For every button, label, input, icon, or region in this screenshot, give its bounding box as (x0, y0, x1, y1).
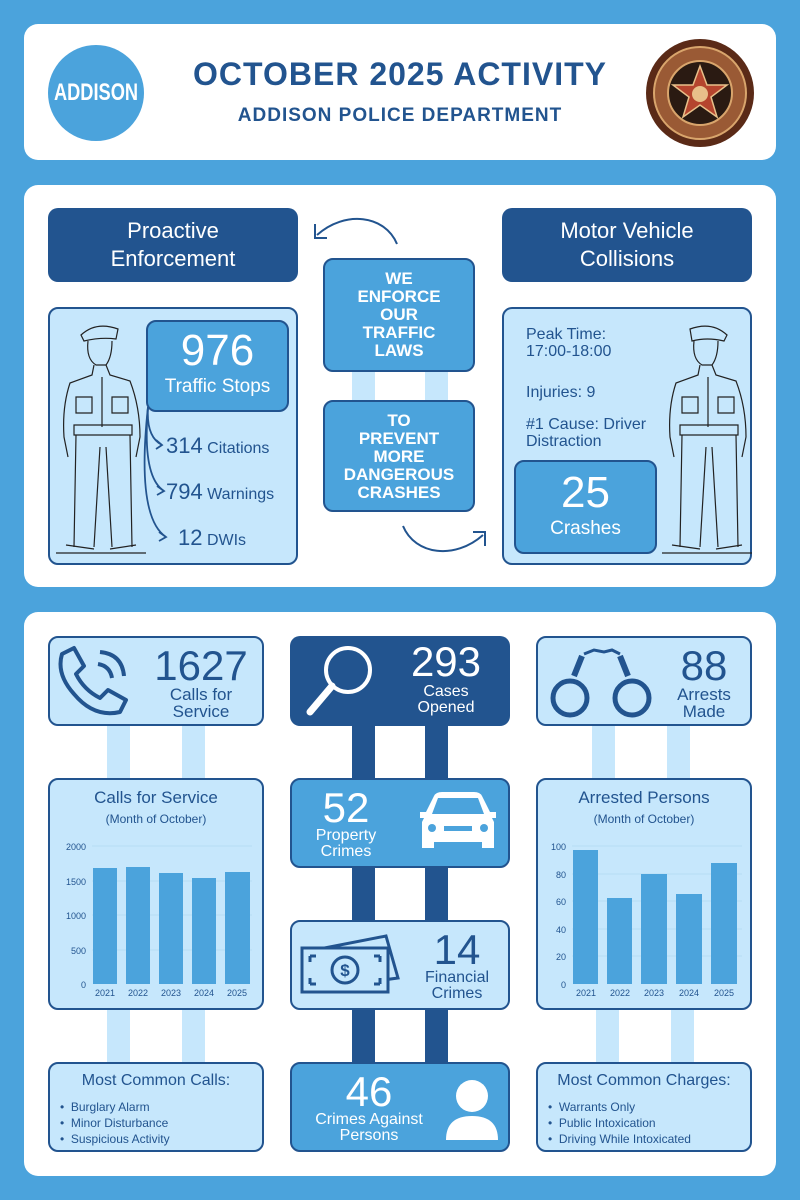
text block: We enforce our traffic laws (323, 258, 475, 372)
text: collision details: Injuries: 9 (526, 384, 595, 401)
icon: money (300, 934, 400, 994)
heading: Proactive Enforcement: Enforcement (111, 246, 235, 271)
chart: arrested persons: 60 (556, 897, 566, 907)
text block: We enforce our traffic laws: TRAFFIC (363, 323, 435, 342)
stat: arrests made (536, 636, 752, 726)
text block: To prevent more dangerous crashes: TO (387, 411, 411, 430)
stat box: 976 traffic stops: Traffic Stops (165, 376, 270, 397)
stat: crimes against persons: Crimes Against (315, 1111, 423, 1128)
subtitle: ADDISON POLICE DEPARTMENT (238, 105, 562, 126)
list: most common calls: • Minor Disturbance (60, 1116, 168, 1130)
chart: arrested persons: (Month of October) (594, 812, 694, 826)
text: 314 citations: 314 Citations (166, 433, 269, 458)
connector strips center (352, 372, 375, 402)
text: collision details: Peak Time: (526, 326, 606, 343)
title: OCTOBER 2025 ACTIVITY (193, 56, 607, 92)
chart: calls for service: 2021 (95, 988, 115, 998)
chart: calls for service: (Month of October) (106, 812, 206, 826)
chart: arrested persons: 80 (556, 870, 566, 880)
chart: calls for service: 2000 (66, 842, 86, 852)
heading: Motor Vehicle Collisions: Motor Vehicle (560, 218, 694, 243)
stat: calls for service: Calls for (170, 685, 232, 704)
arrow: bottom curved (402, 526, 486, 552)
chart: arrested persons: 40 (556, 925, 566, 935)
stat: property crimes (290, 778, 510, 868)
arrows: breakdown (144, 407, 168, 542)
icon: magnifier (306, 646, 372, 716)
chart: calls for service: 2023 (161, 988, 181, 998)
list: most common calls: Most Common Calls: (82, 1072, 230, 1089)
list: most common charges (536, 1062, 752, 1152)
stat: calls for service: Service (173, 702, 229, 721)
list: most common calls (48, 1062, 264, 1152)
icon: money: $ (340, 961, 350, 980)
panel: traffic (24, 185, 776, 587)
panel: proactive stats (48, 307, 298, 565)
list: most common calls: • Burglary Alarm (60, 1100, 150, 1114)
stat: financial crimes: Crimes (432, 985, 482, 1002)
stat: arrests made: Made (683, 702, 725, 721)
arrow: top curved (314, 218, 398, 244)
text: 794 warnings: 794 Warnings (166, 479, 274, 504)
chart: arrested persons: 2025 (714, 988, 734, 998)
stat: cases opened: Cases (423, 683, 469, 700)
chart: arrested persons: 0 (561, 980, 566, 990)
stat box: 976 traffic stops (146, 320, 289, 412)
chart: arrested persons: 2024 (679, 988, 699, 998)
chart: arrested persons: 2021 (576, 988, 596, 998)
stat: property crimes: 52 (323, 784, 369, 831)
panel: collision stats (502, 307, 752, 565)
icon: officer (662, 326, 752, 554)
chart: arrested persons (536, 778, 752, 1010)
stat: financial crimes: Financial (425, 969, 489, 986)
stat: arrests made: Arrests (677, 685, 731, 704)
connector strips (107, 726, 130, 778)
stat: property crimes: Property (316, 827, 376, 844)
text block: We enforce our traffic laws: LAWS (374, 341, 424, 360)
text block: To prevent more dangerous crashes: MORE (374, 447, 424, 466)
text: collision details: Distraction (526, 433, 602, 450)
stat: financial crimes (290, 920, 510, 1010)
chart: arrested persons: Arrested Persons (578, 788, 710, 807)
stat box: 25 crashes (514, 460, 657, 554)
text block: To prevent more dangerous crashes: DANGEROUS (344, 465, 454, 484)
chart: calls for service: 0 (81, 980, 86, 990)
chart: calls for service: 2022 (128, 988, 148, 998)
stat: crimes against persons (290, 1062, 510, 1152)
chart: calls for service (48, 778, 264, 1010)
chart: calls for service: 2025 (227, 988, 247, 998)
chart: calls for service: Calls for Service (94, 788, 218, 807)
badge icon (646, 39, 754, 147)
icon: car (420, 792, 496, 848)
text: collision details: 17:00-18:00 (526, 343, 611, 360)
stat: crimes against persons: 46 (346, 1068, 392, 1115)
chart: calls for service: 1500 (66, 877, 86, 887)
text: 12 DWIs: 12 DWIs (178, 525, 246, 550)
icon: phone (58, 646, 128, 716)
stat: crimes against persons: Persons (340, 1127, 398, 1144)
logo: Addison circle (48, 45, 144, 141)
icon: handcuffs (550, 648, 652, 718)
text block: We enforce our traffic laws: WE (385, 269, 413, 288)
stat box: 976 traffic stops: 976 (181, 326, 254, 375)
chart: arrested persons: 20 (556, 952, 566, 962)
stat: cases opened (290, 636, 510, 726)
logo: Addison circle: ADDISON (54, 79, 138, 106)
text block: We enforce our traffic laws: OUR (380, 305, 418, 324)
header card (24, 24, 776, 160)
text: collision details: #1 Cause: Driver (526, 416, 646, 433)
list: most common charges: • Public Intoxication (548, 1116, 656, 1130)
chart: calls for service: 2024 (194, 988, 214, 998)
icon: person (446, 1080, 498, 1140)
list: most common charges: • Driving While Intoxicated (548, 1132, 691, 1146)
chart: calls for service: 1000 (66, 911, 86, 921)
list: most common charges: Most Common Charges: (557, 1072, 731, 1089)
chart: arrested persons: 2023 (644, 988, 664, 998)
icon: officer (56, 326, 146, 554)
heading: Motor Vehicle Collisions (502, 208, 752, 282)
stat: calls for service (48, 636, 264, 726)
list: most common charges: • Warrants Only (548, 1100, 635, 1114)
stat: cases opened: 293 (411, 638, 481, 685)
stat: cases opened: Opened (418, 699, 474, 716)
panel: crime (24, 612, 776, 1176)
heading: Motor Vehicle Collisions: Collisions (580, 246, 674, 271)
stat: property crimes: Crimes (321, 843, 371, 860)
stat box: 25 crashes: 25 (561, 468, 610, 517)
text block: We enforce our traffic laws: ENFORCE (357, 287, 441, 306)
text: collision details (526, 326, 646, 450)
list: most common calls: • Suspicious Activity (60, 1132, 170, 1146)
heading: Proactive Enforcement: Proactive (127, 218, 219, 243)
chart: arrested persons: 2022 (610, 988, 630, 998)
chart: calls for service: 500 (71, 946, 86, 956)
stat box: 25 crashes: Crashes (550, 518, 621, 539)
chart: arrested persons: 100 (551, 842, 566, 852)
stat: financial crimes: 14 (434, 926, 480, 973)
stat: calls for service: 1627 (154, 642, 248, 689)
text block: To prevent more dangerous crashes: PREVENT (359, 429, 439, 448)
text block: To prevent more dangerous crashes: CRASHES (357, 483, 441, 502)
heading: Proactive Enforcement (48, 208, 298, 282)
stat: arrests made: 88 (681, 642, 727, 689)
text block: To prevent more dangerous crashes (323, 400, 475, 512)
